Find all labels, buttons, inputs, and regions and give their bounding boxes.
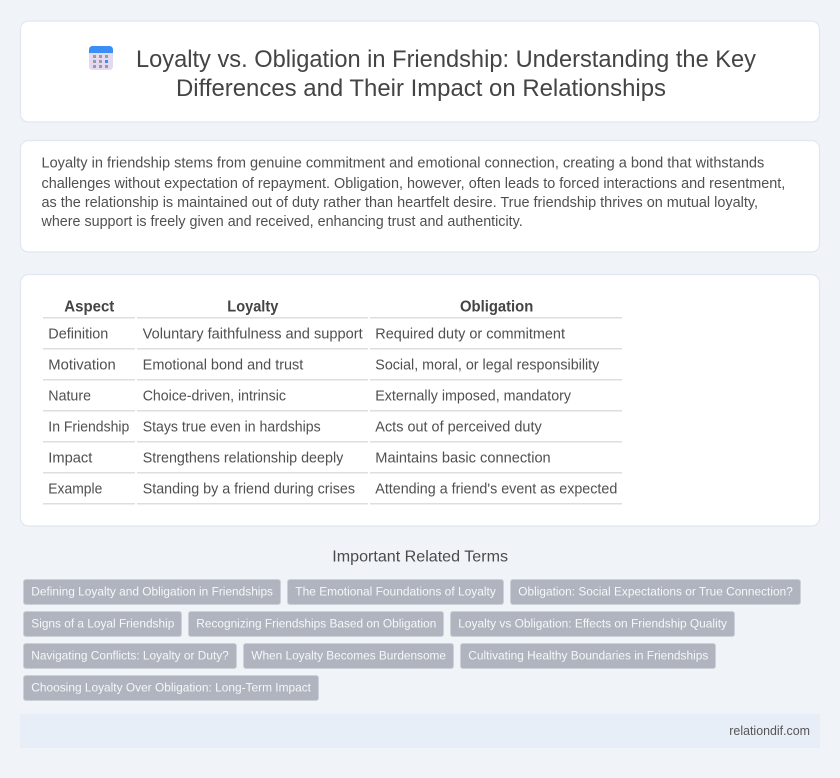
- row: definition: [48, 326, 565, 342]
- tag: defining loyalty: [24, 580, 280, 604]
- panel: comparison table: [20, 274, 820, 526]
- row: example: Example: [48, 481, 102, 497]
- row: in friendship: In Friendship: [48, 419, 129, 435]
- icon: calendar: [89, 46, 113, 70]
- tag: social expectations: [510, 580, 800, 604]
- panel: introduction: [20, 140, 820, 252]
- row: example: Standing by a friend during crises: [143, 481, 355, 497]
- footer bar: relationdif.com: [729, 723, 810, 738]
- tag: choosing loyalty: Choosing Loyalty Over Obligation: Long-Term Impact: [31, 681, 312, 695]
- row: nature: Choice-driven, intrinsic: [143, 388, 286, 404]
- tag: signs of loyal friendship: Signs of a Loyal Friendship: [31, 617, 174, 631]
- tag: burdensome: When Loyalty Becomes Burdensome: [251, 649, 446, 663]
- tag: effects on quality: Loyalty vs Obligation: Effects on Friendship Quality: [458, 617, 728, 631]
- row: definition: Required duty or commitment: [375, 326, 565, 342]
- row: in friendship: Stays true even in hardships: [143, 419, 321, 435]
- table header row: Aspect: [64, 298, 115, 315]
- row: impact: Impact: [48, 450, 92, 466]
- title: Loyalty vs. Obligation in Friendship: Understanding the Key: [136, 46, 756, 73]
- tag: healthy boundaries: Cultivating Healthy Boundaries in Friendships: [468, 649, 708, 663]
- row: motivation: Emotional bond and trust: [143, 357, 303, 373]
- row: nature: [48, 388, 572, 404]
- row: nature: Nature: [48, 388, 91, 404]
- row: in friendship: Acts out of perceived duty: [375, 419, 542, 435]
- tag: social expectations: Obligation: Social Expectations or True Connection?: [518, 585, 793, 599]
- table header row: Obligation: [460, 298, 533, 315]
- row: in friendship: [48, 419, 542, 435]
- row: impact: Maintains basic connection: [375, 450, 551, 466]
- tag: defining loyalty: Defining Loyalty and Obligation in Friendships: [31, 585, 273, 599]
- related term tags: [24, 580, 800, 700]
- title: Differences and Their Impact on Relationships: [176, 75, 666, 102]
- tag: effects on quality: [450, 612, 734, 636]
- row: motivation: Social, moral, or legal responsibility: [375, 357, 600, 373]
- text block: introduction paragraph: where support is freely given and received, enhancing trust and authenticity.: [41, 214, 523, 230]
- row: motivation: Motivation: [48, 357, 116, 373]
- text block: introduction paragraph: challenges without expectation of repayment. Obligation, however, often leads to forced interactions and resentment,: [42, 176, 785, 192]
- tag: emotional foundations: [288, 580, 504, 604]
- footer bar: [20, 714, 820, 748]
- row: definition: Definition: [48, 326, 108, 342]
- row: example: [48, 481, 617, 497]
- tag: choosing loyalty: [24, 676, 318, 700]
- table header row: [64, 298, 533, 315]
- tag: burdensome: [244, 644, 454, 668]
- row: motivation: [48, 357, 600, 373]
- row: impact: Strengthens relationship deeply: [143, 450, 344, 466]
- tag: recognizing friendships: Recognizing Friendships Based on Obligation: [196, 617, 436, 631]
- tag: healthy boundaries: [460, 644, 716, 668]
- tag: recognizing friendships: [188, 612, 444, 636]
- tag: emotional foundations: The Emotional Foundations of Loyalty: [295, 585, 497, 599]
- row: example: Attending a friend's event as expected: [375, 481, 617, 497]
- row: impact: [48, 450, 551, 466]
- title: [136, 46, 756, 102]
- tag: navigating conflicts: [24, 644, 236, 668]
- text block: introduction paragraph: as the relationship is maintained out of duty rather than heartfelt desire. True friendship thrives on mutual loyalty,: [42, 195, 758, 211]
- tag: navigating conflicts: Navigating Conflicts: Loyalty or Duty?: [31, 649, 229, 663]
- row: definition: Voluntary faithfulness and support: [143, 326, 363, 342]
- table header row: Loyalty: [227, 298, 278, 315]
- panel: header: [20, 21, 820, 122]
- tag: signs of loyal friendship: [24, 612, 182, 636]
- row: nature: Externally imposed, mandatory: [375, 388, 572, 404]
- text block: introduction paragraph: Loyalty in friendship stems from genuine commitment and emotional connection, creating a bond that withstands: [42, 156, 764, 172]
- heading: important related terms: Important Related Terms: [332, 548, 508, 565]
- text block: introduction paragraph: [41, 156, 785, 230]
